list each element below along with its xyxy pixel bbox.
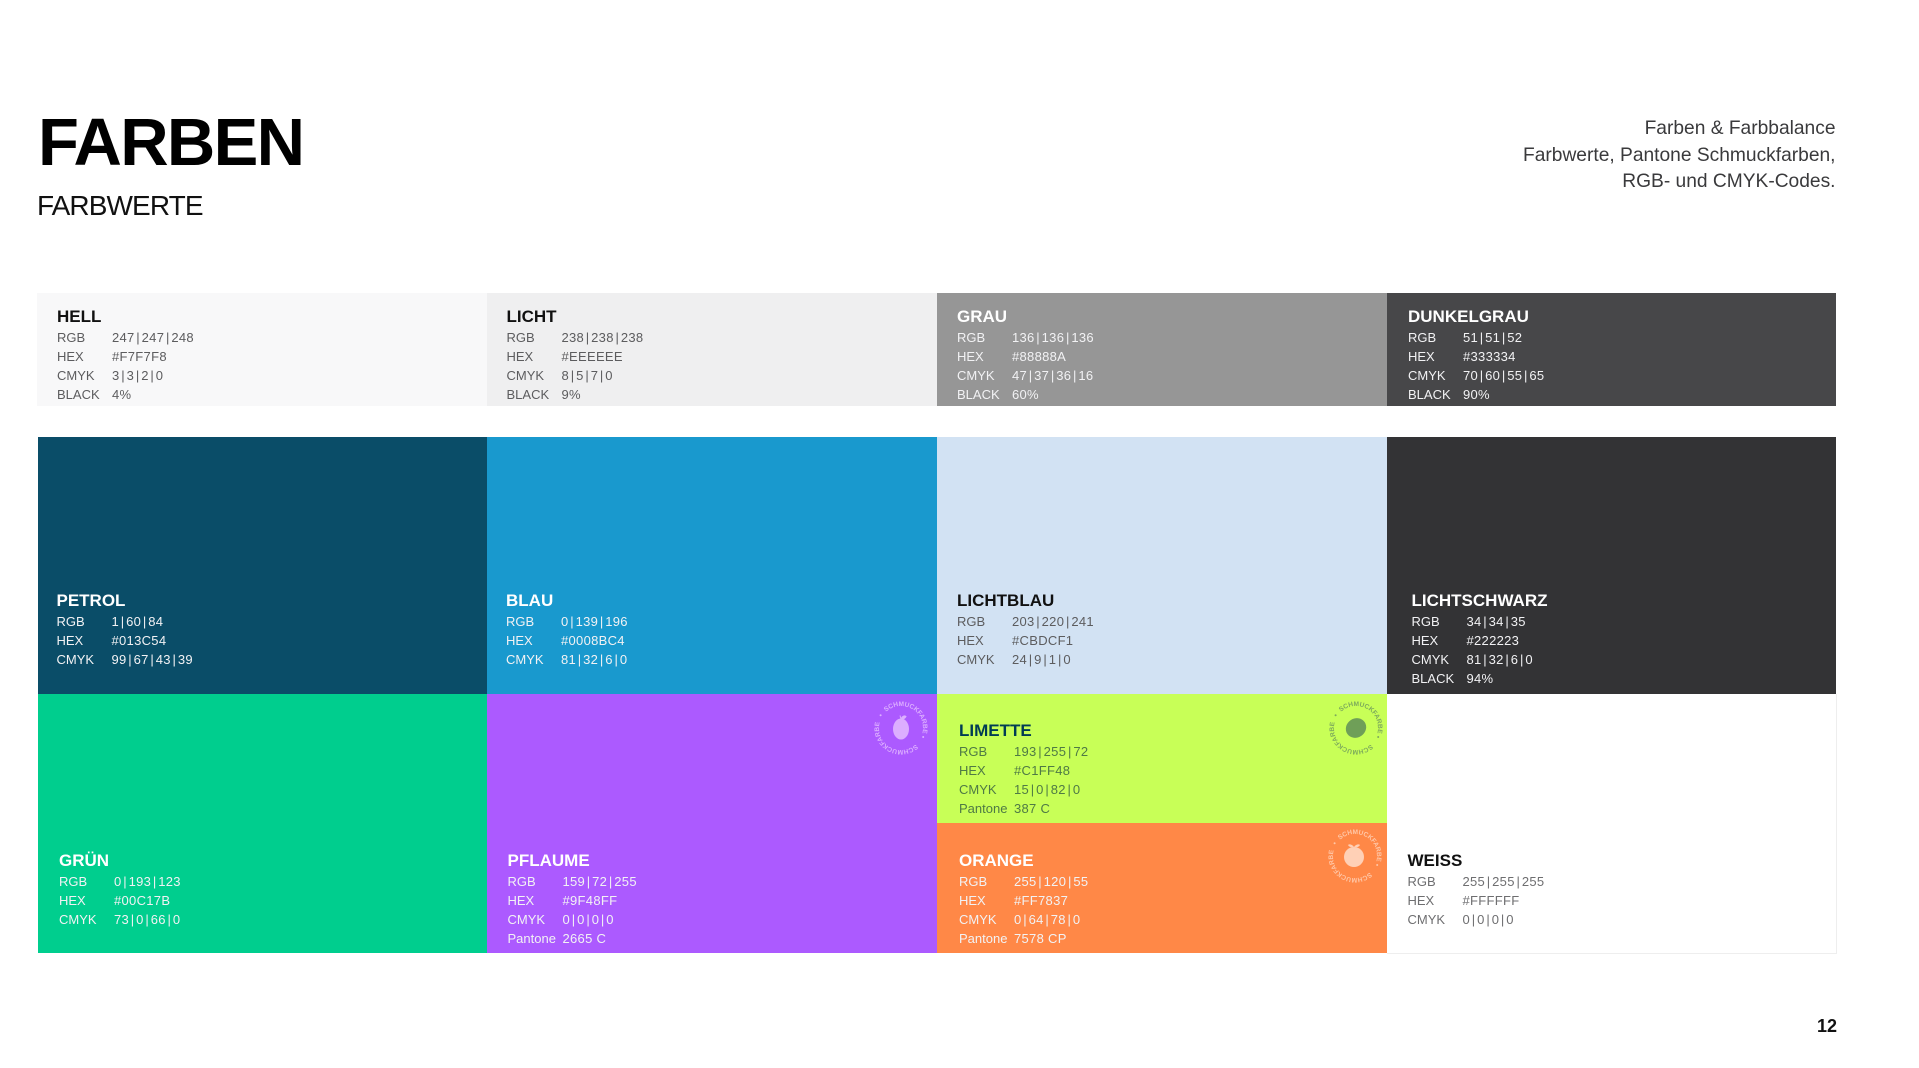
values: hell: CMYK [57,368,95,383]
values: dunkelgrau [1408,330,1544,402]
heading: blau: BLAU [506,591,553,610]
panel: limette [937,694,1387,823]
panel: orange [937,823,1387,953]
values: grau [957,330,1094,402]
values: grau: CMYK [957,368,995,383]
subtitle: FARBWERTE [37,190,203,221]
values: gruen: 0|193|123 [114,874,181,889]
values: lichtschwarz: 34|34|35 [1466,614,1526,629]
values: lichtblau: CMYK [957,652,995,667]
page number: 12 [1817,1016,1837,1036]
values: weiss: 255|255|255 [1462,874,1544,889]
values: limette [959,744,1088,816]
values: hell: #F7F7F8 [112,349,167,364]
values: hell [57,330,194,402]
values: grau: BLACK [957,387,1000,402]
values: weiss: CMYK [1408,912,1445,927]
description text: RGB- und CMYK-Codes. [1622,171,1836,192]
values: lichtschwarz [1412,614,1533,686]
heading: lichtblau: LICHTBLAU [957,591,1054,610]
values: lichtschwarz: 81|32|6|0 [1466,652,1533,667]
values: dunkelgrau: #333334 [1463,349,1516,364]
heading: hell: HELL [57,307,101,326]
heading: weiss: WEISS [1408,851,1462,870]
values: licht: 238|238|238 [562,330,643,345]
values: limette: 387 C [1014,801,1050,816]
values: orange: HEX [959,893,986,908]
values: blau: 81|32|6|0 [561,652,627,667]
values: licht [506,330,643,402]
values: grau: #88888A [1012,349,1066,364]
values: limette: 193|255|72 [1014,744,1088,759]
values: limette: HEX [959,763,986,778]
values: licht: 9% [562,387,581,402]
heading: dunkelgrau: DUNKELGRAU [1408,307,1529,326]
icon: peach badge: SCHMUCKFARBE [1328,850,1372,883]
values: orange: 7578 CP [1014,931,1067,946]
values: petrol: 99|67|43|39 [112,652,193,667]
values: pflaume: RGB [508,874,536,889]
values: gruen: RGB [59,874,87,889]
values: lichtschwarz: RGB [1412,614,1440,629]
values: pflaume: HEX [508,893,534,908]
values: limette: Pantone [959,801,1007,816]
values: gruen: #00C17B [114,893,170,908]
values: dunkelgrau: CMYK [1408,368,1446,383]
values: blau [506,614,628,667]
values: pflaume: Pantone [508,931,556,946]
icon: peach badge [1328,830,1382,883]
values: limette: #C1FF48 [1014,763,1070,778]
icon: plum badge: SCHMUCKFARBE [874,722,918,755]
values: weiss: #FFFFFF [1462,893,1519,908]
values: hell: BLACK [57,387,100,402]
values: hell: HEX [57,349,84,364]
values: orange: RGB [959,874,987,889]
values: grau: 60% [1012,387,1039,402]
values: pflaume: 2665 C [562,931,606,946]
title: FARBEN [38,105,303,180]
values: dunkelgrau: 51|51|52 [1463,330,1522,345]
values: lichtschwarz: HEX [1412,633,1438,648]
values: licht: CMYK [506,368,544,383]
values: pflaume: #9F48FF [562,893,617,908]
values: limette: 15|0|82|0 [1014,782,1080,797]
values: licht: 8|5|7|0 [562,368,613,383]
values: petrol: RGB [56,614,85,629]
values: lichtblau: 203|220|241 [1012,614,1094,629]
values: hell: 3|3|2|0 [112,368,163,383]
values: lichtblau: HEX [957,633,984,648]
values: pflaume: 159|72|255 [562,874,637,889]
icon: plum badge [874,702,928,755]
values: orange: Pantone [959,931,1007,946]
values: lichtschwarz: 94% [1466,671,1493,686]
description text [1523,118,1836,192]
panel: grau [936,293,1387,406]
values: licht: #EEEEEE [562,349,623,364]
icon: lime badge [1330,702,1382,755]
values: lichtschwarz: BLACK [1412,671,1454,686]
values: grau: HEX [957,349,984,364]
panel: pflaume [487,694,937,953]
values: lichtschwarz: #222223 [1466,633,1519,648]
values: licht: BLACK [506,387,549,402]
icon: lime badge: SCHMUCKFARBE [1338,702,1382,734]
values: weiss: HEX [1408,893,1434,908]
values: blau: CMYK [506,652,544,667]
values: lichtblau [957,614,1094,667]
values: weiss [1408,874,1544,927]
heading: petrol: PETROL [56,591,125,610]
values: blau: #0008BC4 [561,633,625,648]
values: gruen: 73|0|66|0 [114,912,180,927]
values: hell: 4% [112,387,131,402]
icon: plum badge: SCHMUCKFARBE [884,702,928,734]
values: dunkelgrau: BLACK [1408,387,1451,402]
description text: Farbwerte, Pantone Schmuckfarben, [1523,145,1836,166]
values: pflaume: 0|0|0|0 [562,912,614,927]
heading: pflaume: PFLAUME [508,851,590,870]
values: lichtblau: #CBDCF1 [1012,633,1073,648]
values: blau: 0|139|196 [561,614,628,629]
values: gruen: CMYK [59,912,97,927]
icon: lime badge: SCHMUCKFARBE [1330,722,1373,755]
panel: weiss [1387,694,1837,954]
description text: Farben & Farbbalance [1645,118,1836,139]
panel: hell [37,293,487,406]
values: grau: 136|136|136 [1012,330,1094,345]
values: limette: RGB [959,744,987,759]
panel: blau [487,436,937,694]
heading: orange: ORANGE [959,851,1034,870]
values: petrol [56,614,193,667]
icon: peach badge: SCHMUCKFARBE [1338,830,1382,862]
values: petrol: 1|60|84 [112,614,163,629]
values: hell: RGB [57,330,85,345]
panel: lichtblau [937,436,1387,694]
heading: lichtschwarz: LICHTSCHWARZ [1412,591,1547,610]
panel: dunkelgrau [1386,293,1836,406]
values: dunkelgrau: HEX [1408,349,1435,364]
values: orange: CMYK [959,912,997,927]
values: weiss: RGB [1408,874,1436,889]
values: petrol: HEX [56,633,83,648]
values: gruen [59,874,181,927]
values: pflaume: CMYK [508,912,545,927]
panel: gruen [38,694,487,953]
panel: licht [487,293,937,406]
values: weiss: 0|0|0|0 [1462,912,1514,927]
values: grau: RGB [957,330,985,345]
values: orange [959,874,1088,946]
values: licht: RGB [506,330,535,345]
panel: lichtschwarz [1387,436,1836,694]
heading: gruen: GRÜN [59,851,109,870]
values: dunkelgrau: 70|60|55|65 [1463,368,1544,383]
values: lichtblau: 24|9|1|0 [1012,652,1071,667]
values: gruen: HEX [59,893,86,908]
heading: licht: LICHT [506,307,557,326]
values: orange: #FF7837 [1014,893,1068,908]
values: pflaume [508,874,637,946]
panel: petrol [38,436,487,694]
values: dunkelgrau: RGB [1408,330,1436,345]
values: limette: CMYK [959,782,997,797]
heading: grau: GRAU [957,307,1007,326]
values: blau: RGB [506,614,534,629]
heading: limette: LIMETTE [959,721,1032,740]
values: orange: 255|120|55 [1014,874,1088,889]
values: petrol: CMYK [56,652,94,667]
values: petrol: #013C54 [112,633,166,648]
values: lichtschwarz: CMYK [1412,652,1449,667]
values: lichtblau: RGB [957,614,985,629]
values: hell: 247|247|248 [112,330,194,345]
values: grau: 47|37|36|16 [1012,368,1093,383]
values: blau: HEX [506,633,533,648]
values: licht: HEX [506,349,533,364]
values: orange: 0|64|78|0 [1014,912,1080,927]
values: dunkelgrau: 90% [1463,387,1490,402]
